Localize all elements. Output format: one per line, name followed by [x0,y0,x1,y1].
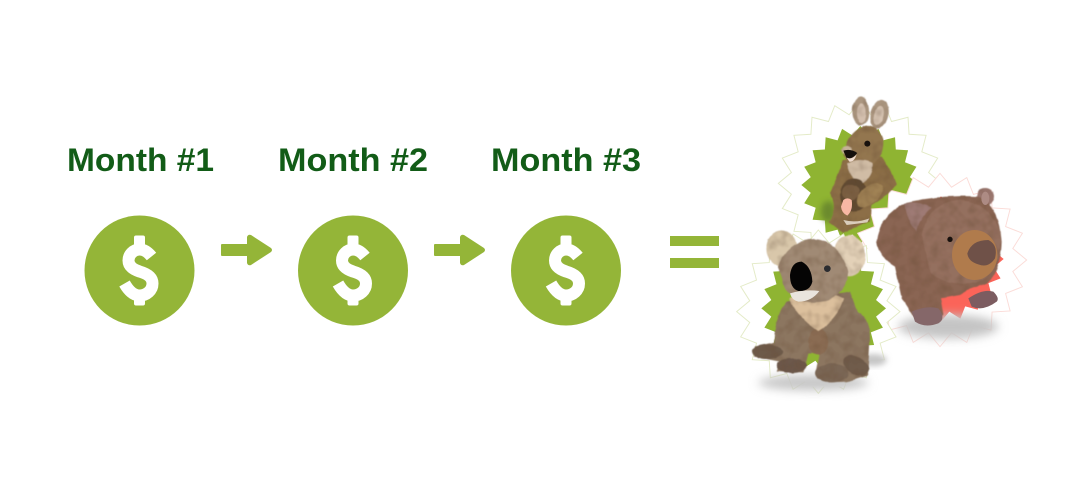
wombat plush [877,188,1002,339]
kangaroo plush [821,96,896,232]
heading: month 3: Month #3 [491,142,641,178]
infographic [69,96,1028,396]
heading: month 1: Month #1 [67,142,214,178]
arrow: month 2 to month 3 [434,235,485,265]
step: month 2 [278,142,428,326]
step: month 1 [67,142,214,326]
icon: dollar coin 1 [84,216,194,326]
plush animals group [737,96,1027,393]
step: month 3 [491,142,641,326]
koala plush [752,230,887,391]
icon: dollar coin 3 [511,216,621,326]
koala starburst [737,230,900,393]
kangaroo starburst [778,102,942,265]
icon: dollar coin 2 [298,216,408,326]
wombat starburst [853,173,1027,347]
arrow: month 1 to month 2 [221,235,272,265]
icon: equals sign [670,236,719,268]
heading: month 2: Month #2 [278,142,428,178]
